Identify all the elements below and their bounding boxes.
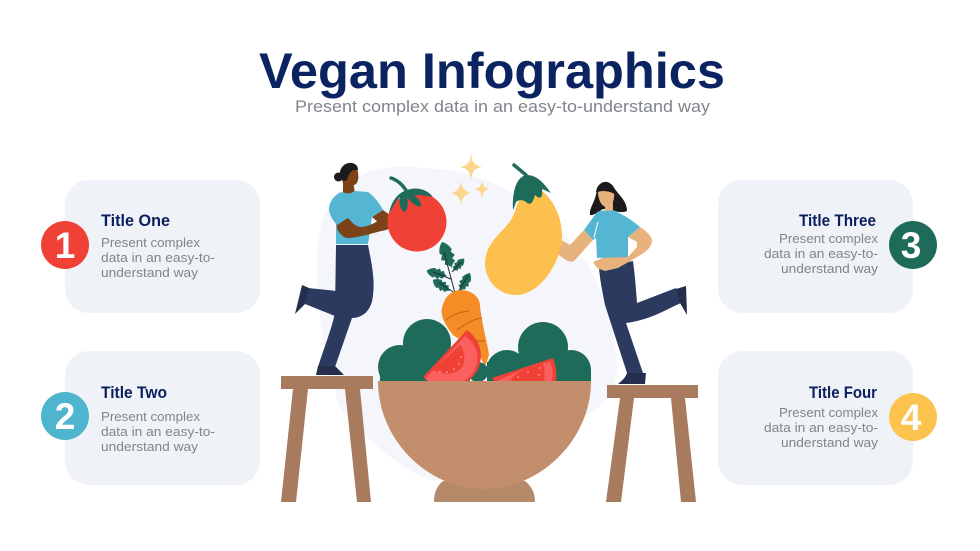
badge 3 (889, 221, 937, 269)
person two (558, 182, 687, 384)
heading: title four: Title Four (809, 384, 878, 402)
icon: tomato (388, 178, 446, 252)
arm on hip (593, 227, 652, 271)
hair (340, 163, 358, 181)
icon: right greens (486, 322, 591, 392)
far arm (372, 210, 394, 228)
fringe (596, 182, 615, 194)
icon: left tomato slice (423, 330, 481, 381)
badge 1: 1 (55, 225, 75, 266)
text: card four body: understand way (781, 435, 879, 450)
shirt (329, 191, 383, 244)
panel: card three (718, 180, 937, 313)
heading: title one: Title One (101, 212, 170, 230)
text: card three body: data in an easy-to- (764, 246, 878, 261)
text: card four body (764, 405, 879, 450)
text: card four body: Present complex (779, 405, 879, 420)
badge 3: 3 (901, 225, 921, 266)
text: card two body: understand way (101, 439, 199, 454)
text: card one body (101, 235, 215, 280)
text: card three body (764, 231, 879, 276)
shirt highlight (594, 222, 598, 238)
bowl (378, 381, 591, 502)
trousers (318, 245, 374, 367)
text: card three body: Present complex (779, 231, 879, 246)
neck (605, 200, 613, 212)
face (598, 191, 614, 207)
heading: title three: Title Three (799, 212, 876, 230)
text: card three body: understand way (781, 261, 879, 276)
raised leg (305, 288, 337, 316)
title: Vegan Infographics (259, 43, 725, 99)
text: card two body (101, 409, 215, 454)
icon: carrot (425, 239, 489, 367)
text: card one body: understand way (101, 265, 199, 280)
arm to eggplant (558, 230, 593, 262)
neck (343, 180, 355, 196)
badge 2 (41, 392, 89, 440)
raised foot (676, 286, 687, 315)
icon: eggplant (485, 165, 562, 295)
badge 1 (41, 221, 89, 269)
hair back (590, 183, 627, 215)
background blob (317, 167, 617, 480)
carrot leaves (425, 239, 475, 296)
text: card two body: Present complex (101, 409, 201, 424)
icon: left greens (378, 319, 488, 389)
shoe (316, 366, 344, 375)
panel: card four (718, 351, 937, 485)
badge 4: 4 (901, 397, 922, 438)
panel: card one (41, 180, 260, 313)
heading: title two: Title Two (101, 384, 167, 402)
arm (337, 215, 398, 238)
badge 4 (889, 393, 937, 441)
face (342, 166, 358, 186)
shoe (618, 373, 646, 384)
panel: card two (41, 351, 260, 485)
icon: right tomato slice (492, 358, 556, 381)
text: card two body: data in an easy-to- (101, 424, 215, 439)
person one (295, 163, 398, 375)
trousers (599, 261, 681, 373)
badge 2: 2 (55, 396, 75, 437)
icon: sparkles (451, 153, 490, 205)
text: card one body: Present complex (101, 235, 201, 250)
text: card four body: data in an easy-to- (764, 420, 878, 435)
shirt (584, 210, 640, 258)
subtitle: Present complex data in an easy-to-understand way (295, 97, 711, 116)
carrot stems (433, 252, 468, 293)
text: card one body: data in an easy-to- (101, 250, 215, 265)
left stool (281, 376, 373, 502)
carrot body (442, 290, 489, 367)
right stool (606, 385, 698, 502)
